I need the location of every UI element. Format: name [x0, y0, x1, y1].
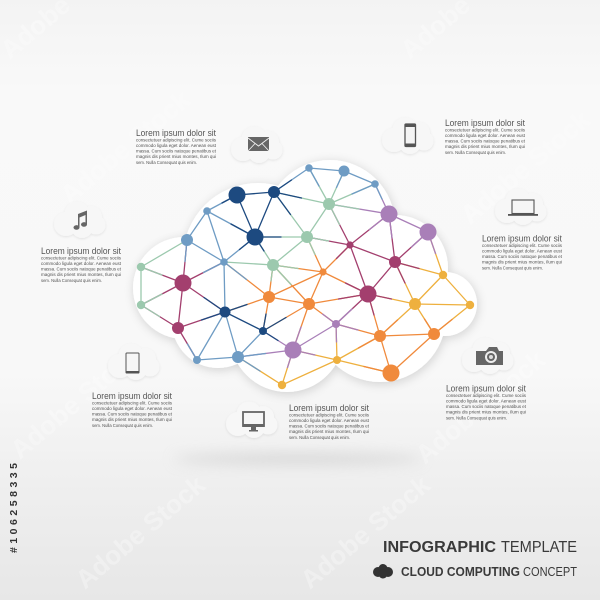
text block: right: Lorem ipsum dolor sit — [482, 232, 562, 244]
text block: bottom center: massa. Cum sociis natoque penatibus et — [289, 424, 370, 429]
icon: monitor in cloud — [226, 402, 278, 438]
text block: top left: sem. Nulla Consequat quis enim. — [136, 160, 197, 165]
stock image id: #106258335 — [8, 463, 20, 553]
network nodes — [137, 164, 474, 389]
text block: lower right: sem. Nulla Consequat quis enim. — [446, 415, 507, 420]
icon: envelope in cloud — [231, 126, 282, 163]
text block: left: commodo ligula eget dolor. Aenean eust — [41, 261, 122, 266]
watermark: Adobe Stock — [295, 469, 436, 595]
icon: music note in cloud — [54, 202, 106, 238]
icon: dark cloud — [373, 564, 393, 578]
watermark: Adobe Stock — [410, 344, 551, 470]
text block: lower left — [92, 390, 173, 428]
watermark: Adobe Stock — [455, 104, 596, 230]
text block: bottom center: magnis dis prient mius montes, Ilum qui — [289, 429, 369, 434]
watermark: Adobe Stock — [55, 84, 196, 210]
icon: laptop in cloud — [495, 188, 546, 225]
text block: left: consectetuer adipiscing elit. Cume sociis — [41, 256, 122, 260]
watermark: Adobe Stock — [5, 339, 146, 465]
text block: lower right: magnis dis prient mius montes, Ilum qui — [446, 410, 526, 415]
main cloud shape — [133, 160, 477, 392]
text block: top left — [136, 127, 217, 165]
text block: right — [482, 232, 563, 270]
text block: top left: consectetuer adipiscing elit. Cume sociis — [136, 138, 217, 142]
text block: bottom center: consectetuer adipiscing elit. Cume sociis — [289, 412, 370, 418]
text block: lower left: commodo ligula eget dolor. Aenean eust — [92, 406, 173, 411]
text block: lower right: Lorem ipsum dolor sit — [446, 382, 526, 394]
text block: lower left: magnis dis prient mius montes, Ilum qui — [92, 417, 172, 422]
title: infographic template: INFOGRAPHIC — [383, 539, 496, 556]
text block: lower left: sem. Nulla Consequat quis enim. — [92, 423, 153, 428]
network — [137, 164, 474, 389]
text block: lower right: massa. Cum sociis natoque penatibus et — [446, 404, 527, 409]
text block: top right: magnis dis prient mius montes, Ilum qui — [445, 144, 525, 149]
text block: left: Lorem ipsum dolor sit — [41, 245, 121, 256]
title: infographic template — [383, 539, 577, 556]
text block: top left: massa. Cum sociis natoque penatibus et — [136, 149, 217, 154]
icon: tablet in cloud — [108, 344, 160, 380]
text block: top left: magnis dis prient mius montes, Ilum qui — [136, 154, 216, 159]
ground shadow — [173, 453, 423, 465]
title: infographic template: TEMPLATE — [501, 539, 577, 556]
icon: camera in cloud — [462, 338, 514, 374]
text block: top left: commodo ligula eget dolor. Aenean eust — [136, 143, 217, 148]
text block: left — [41, 245, 122, 283]
text block: left: magnis dis prient mius montes, Ilum qui — [41, 272, 121, 277]
text block: right: commodo ligula eget dolor. Aenean eust — [482, 248, 563, 254]
text block: left: massa. Cum sociis natoque penatibus et — [41, 267, 122, 272]
text block: lower left: massa. Cum sociis natoque penatibus et — [92, 412, 173, 417]
text block: top right: massa. Cum sociis natoque penatibus et — [445, 139, 526, 144]
text block: lower right: consectetuer adipiscing elit. Cume sociis — [446, 393, 527, 398]
subtitle: cloud computing concept: CONCEPT — [523, 565, 577, 579]
text block: top right — [445, 117, 526, 155]
text block: right: consectetuer adipiscing elit. Cume sociis — [482, 243, 563, 248]
subtitle: cloud computing concept: CLOUD COMPUTING — [401, 565, 520, 579]
text block: bottom center — [289, 402, 370, 440]
text block: top right: sem. Nulla Consequat quis enim. — [445, 150, 506, 155]
text block: lower left: Lorem ipsum dolor sit — [92, 390, 172, 401]
watermark: Adobe Stock — [70, 469, 211, 595]
text block: bottom center: Lorem ipsum dolor sit — [289, 402, 369, 413]
text block: bottom center: sem. Nulla Consequat quis enim. — [289, 435, 350, 440]
text block: top right: consectetuer adipiscing elit. Cume sociis — [445, 128, 526, 132]
text block: left: sem. Nulla Consequat quis enim. — [41, 278, 102, 283]
text block: top right: commodo ligula eget dolor. Aenean eust — [445, 133, 526, 138]
text block: lower left: consectetuer adipiscing elit. Cume sociis — [92, 400, 173, 406]
text block: lower right — [446, 382, 527, 420]
text block: right: magnis dis prient mius montes, Ilum qui — [482, 260, 562, 265]
text block: lower right: commodo ligula eget dolor. Aenean eust — [446, 398, 527, 404]
text block: top right: Lorem ipsum dolor sit — [445, 117, 525, 128]
icon: smartphone in cloud — [382, 118, 434, 154]
text block: bottom center: commodo ligula eget dolor. Aenean eust — [289, 418, 370, 423]
network links — [141, 168, 470, 385]
text block: right: sem. Nulla Consequat quis enim. — [482, 265, 543, 270]
text block: right: massa. Cum sociis natoque penatibus et — [482, 254, 563, 259]
text block: top left: Lorem ipsum dolor sit — [136, 127, 216, 138]
